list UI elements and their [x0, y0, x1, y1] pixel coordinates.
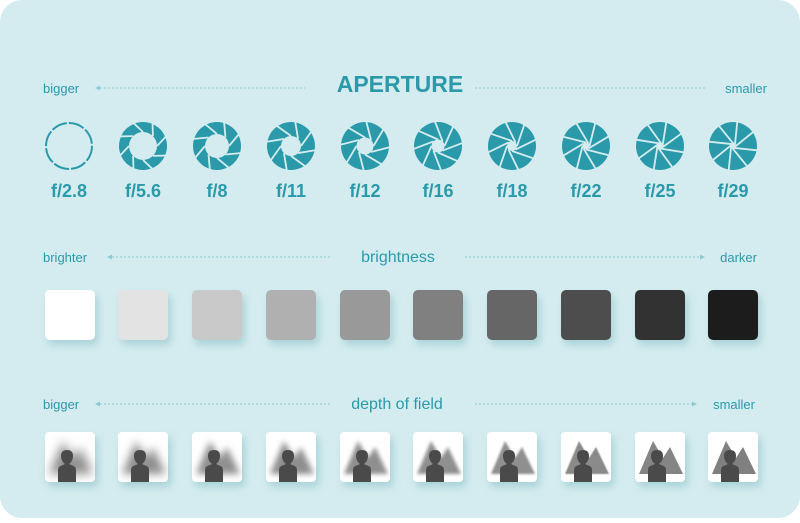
f-stop labels: f/25 [644, 181, 676, 201]
f-stop labels: f/2.8 [51, 181, 87, 201]
aperture header [43, 71, 768, 97]
f-stop labels: f/22 [570, 181, 602, 201]
icon: f/5.6 [119, 122, 167, 170]
brightness header: darker [720, 250, 758, 265]
f-stop labels: f/8 [206, 181, 228, 201]
depth of field header: bigger [43, 397, 80, 412]
aperture header: smaller [725, 81, 768, 96]
f-stop labels: f/18 [496, 181, 528, 201]
icon: f/12 [341, 122, 389, 170]
icon: f/22 [562, 122, 610, 170]
icon: f/16 [414, 122, 462, 170]
f-stop labels: f/29 [717, 181, 749, 201]
icon: f/18 [488, 122, 536, 170]
aperture icons [46, 122, 757, 170]
aperture header: bigger [43, 81, 80, 96]
f-stop labels [51, 181, 749, 201]
icon: f/25 [636, 122, 684, 170]
brightness header: brighter [43, 250, 88, 265]
f-stop labels: f/16 [422, 181, 454, 201]
brightness header [43, 249, 758, 266]
depth of field tiles [45, 432, 758, 482]
icon: f/8 [193, 122, 241, 170]
icon: f/29 [709, 122, 757, 170]
depth of field header [43, 396, 756, 413]
f-stop labels: f/11 [276, 181, 306, 201]
icon: f/2.8 [46, 123, 92, 169]
icon: f/11 [267, 122, 315, 170]
aperture header: APERTURE [337, 71, 463, 97]
depth of field header: depth of field [351, 396, 443, 413]
brightness squares [45, 290, 758, 340]
brightness header: brightness [361, 249, 435, 266]
depth of field header: smaller [713, 397, 756, 412]
f-stop labels: f/5.6 [125, 181, 161, 201]
f-stop labels: f/12 [349, 181, 381, 201]
